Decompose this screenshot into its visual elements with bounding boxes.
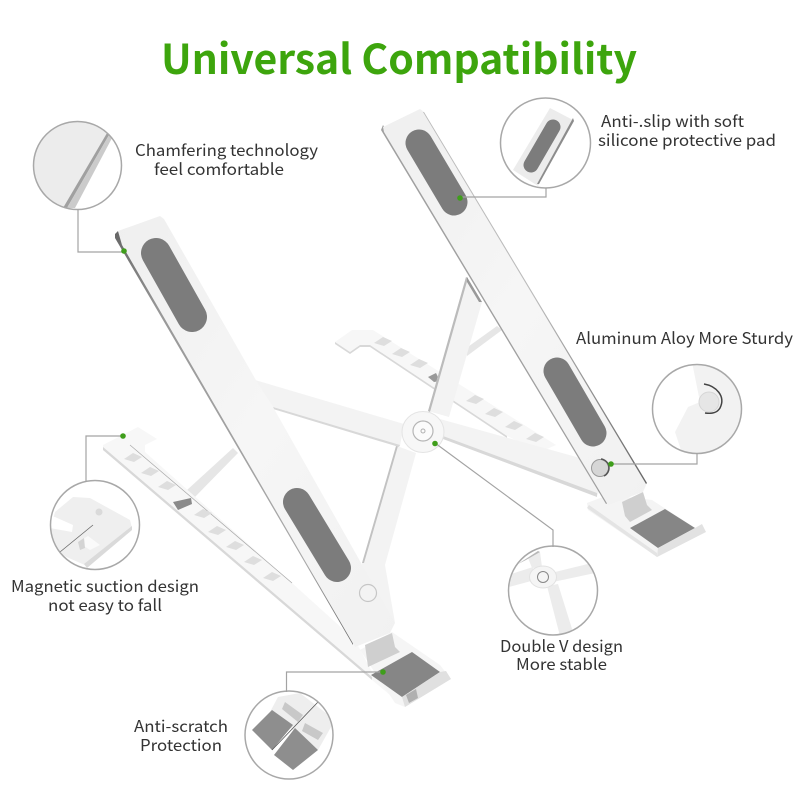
aluminum label: Aluminum Aloy More Sturdy <box>576 325 794 349</box>
rear base plate <box>335 330 556 452</box>
magnetic label <box>11 573 199 616</box>
callout: aluminum <box>576 325 794 467</box>
rear brace <box>465 326 502 356</box>
magnetic label: not easy to fall <box>48 592 162 616</box>
aluminum zoom icon <box>675 366 740 452</box>
aluminum dot <box>608 461 614 467</box>
rear pad top <box>419 143 454 202</box>
front base plate <box>103 427 402 705</box>
anti-scratch label: Anti-scratch <box>134 713 228 737</box>
front pad bottom <box>297 502 337 568</box>
chamfer leader <box>78 209 124 252</box>
magnetic label: Magnetic suction design <box>11 573 199 597</box>
double V ring <box>508 546 598 635</box>
anti-scratch dot <box>380 669 386 675</box>
front foot <box>360 632 451 707</box>
rear foot <box>587 492 706 557</box>
callout: chamfering <box>30 120 319 254</box>
rear panel <box>381 109 647 505</box>
anti-slip dot <box>457 195 463 201</box>
aluminum ring <box>652 364 742 454</box>
double V label <box>500 633 623 675</box>
rear hinge <box>592 459 609 476</box>
chamfer zoom icon <box>30 120 112 208</box>
anti-scratch zoom icon <box>252 693 335 770</box>
aluminum leader <box>611 453 697 464</box>
magnetic leader <box>86 436 123 482</box>
front pad top <box>156 253 192 317</box>
rear pad bottom <box>557 371 593 433</box>
left arm <box>255 380 404 447</box>
double V dot <box>432 441 438 446</box>
anti-slip label <box>598 108 776 151</box>
double V label: More stable <box>516 651 607 675</box>
right arm <box>440 419 600 497</box>
product: front laptop stand <box>103 216 451 707</box>
anti-slip label: silicone protective pad <box>598 127 776 151</box>
chamfer ring <box>34 122 122 210</box>
magnetic ring <box>50 480 140 570</box>
anti-slip leader <box>460 188 546 197</box>
chamfer label: Chamfering technology <box>135 137 319 161</box>
title: Universal Compatibility <box>161 26 637 86</box>
chamfer label: feel comfortable <box>154 156 284 180</box>
chamfer dot <box>121 248 127 254</box>
anti-slip zoom icon <box>513 108 574 186</box>
front brace <box>175 448 238 501</box>
chamfer label <box>135 137 319 180</box>
magnetic dot <box>120 433 126 439</box>
product: rear laptop stand <box>335 109 706 557</box>
front hinge <box>360 584 376 602</box>
anti-scratch ring <box>245 691 333 779</box>
anti-slip label: Anti-.slip with soft <box>601 108 744 132</box>
callout: double V <box>432 441 623 675</box>
magnetic zoom icon <box>50 497 132 568</box>
front lower strut <box>362 446 416 623</box>
callout: anti-scratch <box>134 669 386 779</box>
anti-scratch leader <box>286 672 383 692</box>
callout: magnetic <box>11 433 199 616</box>
anti-scratch label: Protection <box>140 732 222 756</box>
double V zoom icon <box>510 551 593 634</box>
anti-slip ring <box>500 98 590 188</box>
front panel <box>115 216 395 647</box>
rear upper strut <box>428 277 482 417</box>
centre pivot <box>402 412 444 452</box>
callout: anti-slip <box>457 98 776 201</box>
anti-scratch label <box>134 713 228 756</box>
double V leader <box>435 443 553 547</box>
double V label: Double V design <box>500 633 623 657</box>
